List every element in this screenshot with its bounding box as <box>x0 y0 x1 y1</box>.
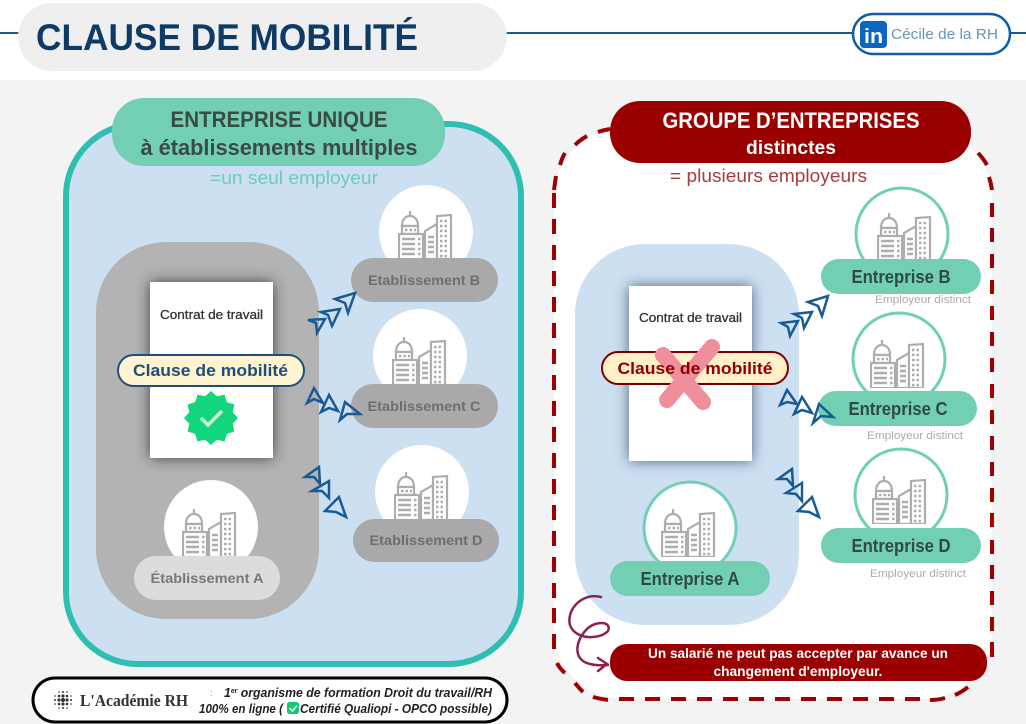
establishment D <box>353 445 499 562</box>
entreprise B: Employeur distinct <box>875 294 971 306</box>
document: contrat de travail: Contrat de travail <box>639 310 742 325</box>
entreprise A <box>610 482 770 596</box>
heading: entreprise unique: ENTREPRISE UNIQUE <box>170 107 388 132</box>
icon: green check <box>287 702 299 714</box>
blue company block <box>575 244 799 625</box>
arrows: to entreprise B <box>781 296 828 336</box>
establishment B: Etablissement B <box>368 272 480 288</box>
document: contrat de travail <box>150 282 273 458</box>
icon: red cross <box>663 347 712 402</box>
icon: academy dots <box>54 691 72 709</box>
document: contrat de travail: Contrat de travail <box>160 307 263 322</box>
title <box>18 3 507 71</box>
establishment A: Établissement A <box>150 570 264 586</box>
entreprise D: Entreprise D <box>852 536 950 556</box>
tagline line 2: 100% en ligne ( <box>199 702 285 716</box>
entreprise D <box>821 449 981 580</box>
entreprise B <box>821 188 981 306</box>
title: CLAUSE DE MOBILITÉ <box>36 17 418 58</box>
label: clause de mobilité <box>118 355 304 386</box>
tagline line 1: 1 <box>224 686 231 700</box>
subtitle: un seul employeur: =un seul employeur <box>210 168 378 188</box>
arrows: to entreprise D <box>778 469 819 517</box>
heading: groupe d'entreprises: distinctes <box>746 138 836 159</box>
linkedin badge: Cécile de la RH <box>891 26 998 43</box>
heading: entreprise unique <box>112 98 445 166</box>
footer banner <box>33 678 507 722</box>
subtitle: plusieurs employeurs: = plusieurs employeurs <box>670 166 867 186</box>
entreprise A: Entreprise A <box>640 569 740 589</box>
heading: groupe d'entreprises: GROUPE D’ENTREPRISES <box>662 108 920 133</box>
icon: green validated badge <box>184 391 238 445</box>
document: contrat de travail <box>629 286 752 461</box>
arrows: to establishment D <box>305 467 346 517</box>
entreprise C: Entreprise C <box>848 399 948 419</box>
tagline line 2: Certifié Qualiopi - OPCO possible) <box>300 702 492 716</box>
tagline line 1: organisme de formation Droit du travail/RH <box>237 686 493 700</box>
callout: salarié note: changement d'employeur. <box>714 663 882 679</box>
arrows: to establishment C <box>307 388 360 420</box>
callout: salarié note: Un salarié ne peut pas accepter par avance un <box>648 645 948 661</box>
heading: entreprise unique: à établissements multiples <box>140 135 418 160</box>
entreprise D: Employeur distinct <box>870 568 966 580</box>
panel: entreprise unique <box>66 98 521 664</box>
clause text: Clause de mobilité <box>618 359 772 378</box>
heading: groupe d'entreprises <box>610 101 971 163</box>
panel: groupe d'entreprises <box>554 101 992 700</box>
arrow: curly pointer to note <box>569 596 609 671</box>
establishment B <box>351 185 498 302</box>
entreprise B: Entreprise B <box>852 267 950 287</box>
arrows: to entreprise C <box>780 390 833 423</box>
grey company block <box>96 242 319 619</box>
callout: salarié note <box>610 644 987 681</box>
arrows: to establishment B <box>308 293 355 333</box>
separator colon: : <box>210 688 213 698</box>
establishment A <box>134 480 280 600</box>
establishment C: Etablissement C <box>368 398 480 414</box>
establishment C <box>351 309 498 428</box>
entreprise C <box>818 313 977 442</box>
establishment D: Etablissement D <box>370 532 482 548</box>
entreprise C: Employeur distinct <box>867 430 963 442</box>
label: clause de mobilité crossed out <box>602 347 788 402</box>
academy name: L'Académie RH <box>80 691 188 710</box>
linkedin badge <box>853 14 1010 54</box>
label: clause de mobilité: Clause de mobilité <box>133 361 288 380</box>
tagline line 1: er <box>231 688 239 695</box>
linkedin badge: in <box>864 26 883 48</box>
